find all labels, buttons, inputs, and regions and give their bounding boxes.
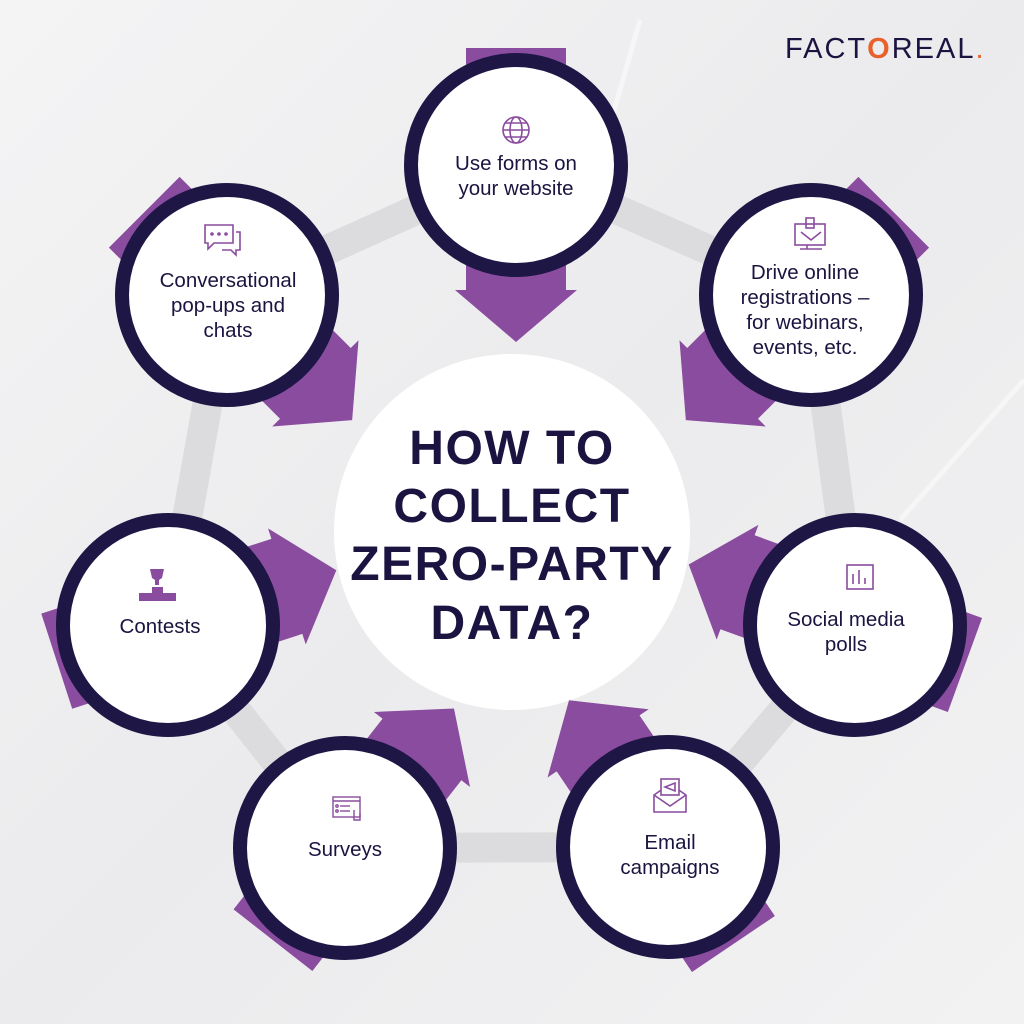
node: use forms on your website — [411, 48, 621, 342]
center circle with title: ZERO-PARTY — [350, 538, 674, 591]
icon: envelope — [654, 779, 686, 812]
logo: FACTOREAL. — [785, 33, 986, 65]
node: conversational pop-ups and chats: Conversational — [160, 269, 296, 292]
node: social media polls: polls — [825, 633, 867, 656]
center circle with title: HOW TO — [409, 422, 615, 475]
icon: bar chart — [847, 565, 873, 589]
node: contests — [38, 512, 355, 730]
icon: monitor registration — [795, 218, 825, 249]
node: social media polls: Social media — [787, 608, 905, 631]
center circle with title — [334, 354, 690, 710]
node: conversational pop-ups and chats — [101, 169, 395, 463]
node: use forms on your website: your website — [458, 177, 574, 200]
node: email campaigns: campaigns — [620, 856, 720, 879]
center circle with title: DATA? — [430, 597, 594, 650]
icon: chat bubbles — [205, 225, 240, 255]
icon: trophy podium — [139, 569, 176, 601]
icon: survey form — [333, 797, 360, 820]
node: conversational pop-ups and chats: chats — [204, 319, 252, 342]
connecting heptagon band — [168, 165, 855, 848]
node: drive online registrations: Drive online — [751, 261, 859, 284]
node: use forms on your website: Use forms on — [455, 152, 577, 175]
node: social media polls — [668, 507, 986, 730]
node: drive online registrations: for webinars, — [746, 311, 864, 334]
center circle with title: COLLECT — [393, 480, 631, 533]
node: drive online registrations — [643, 169, 937, 463]
node: drive online registrations: registrations – — [741, 286, 870, 309]
node: email campaigns — [518, 666, 784, 978]
node: drive online registrations: events, etc. — [753, 336, 857, 359]
node: email campaigns: Email — [644, 831, 696, 854]
node: surveys — [225, 671, 502, 978]
node: conversational pop-ups and chats: pop-ups and — [171, 294, 285, 317]
node: contests: Contests — [120, 615, 200, 638]
node: surveys: Surveys — [308, 838, 382, 861]
icon: globe — [503, 117, 529, 143]
